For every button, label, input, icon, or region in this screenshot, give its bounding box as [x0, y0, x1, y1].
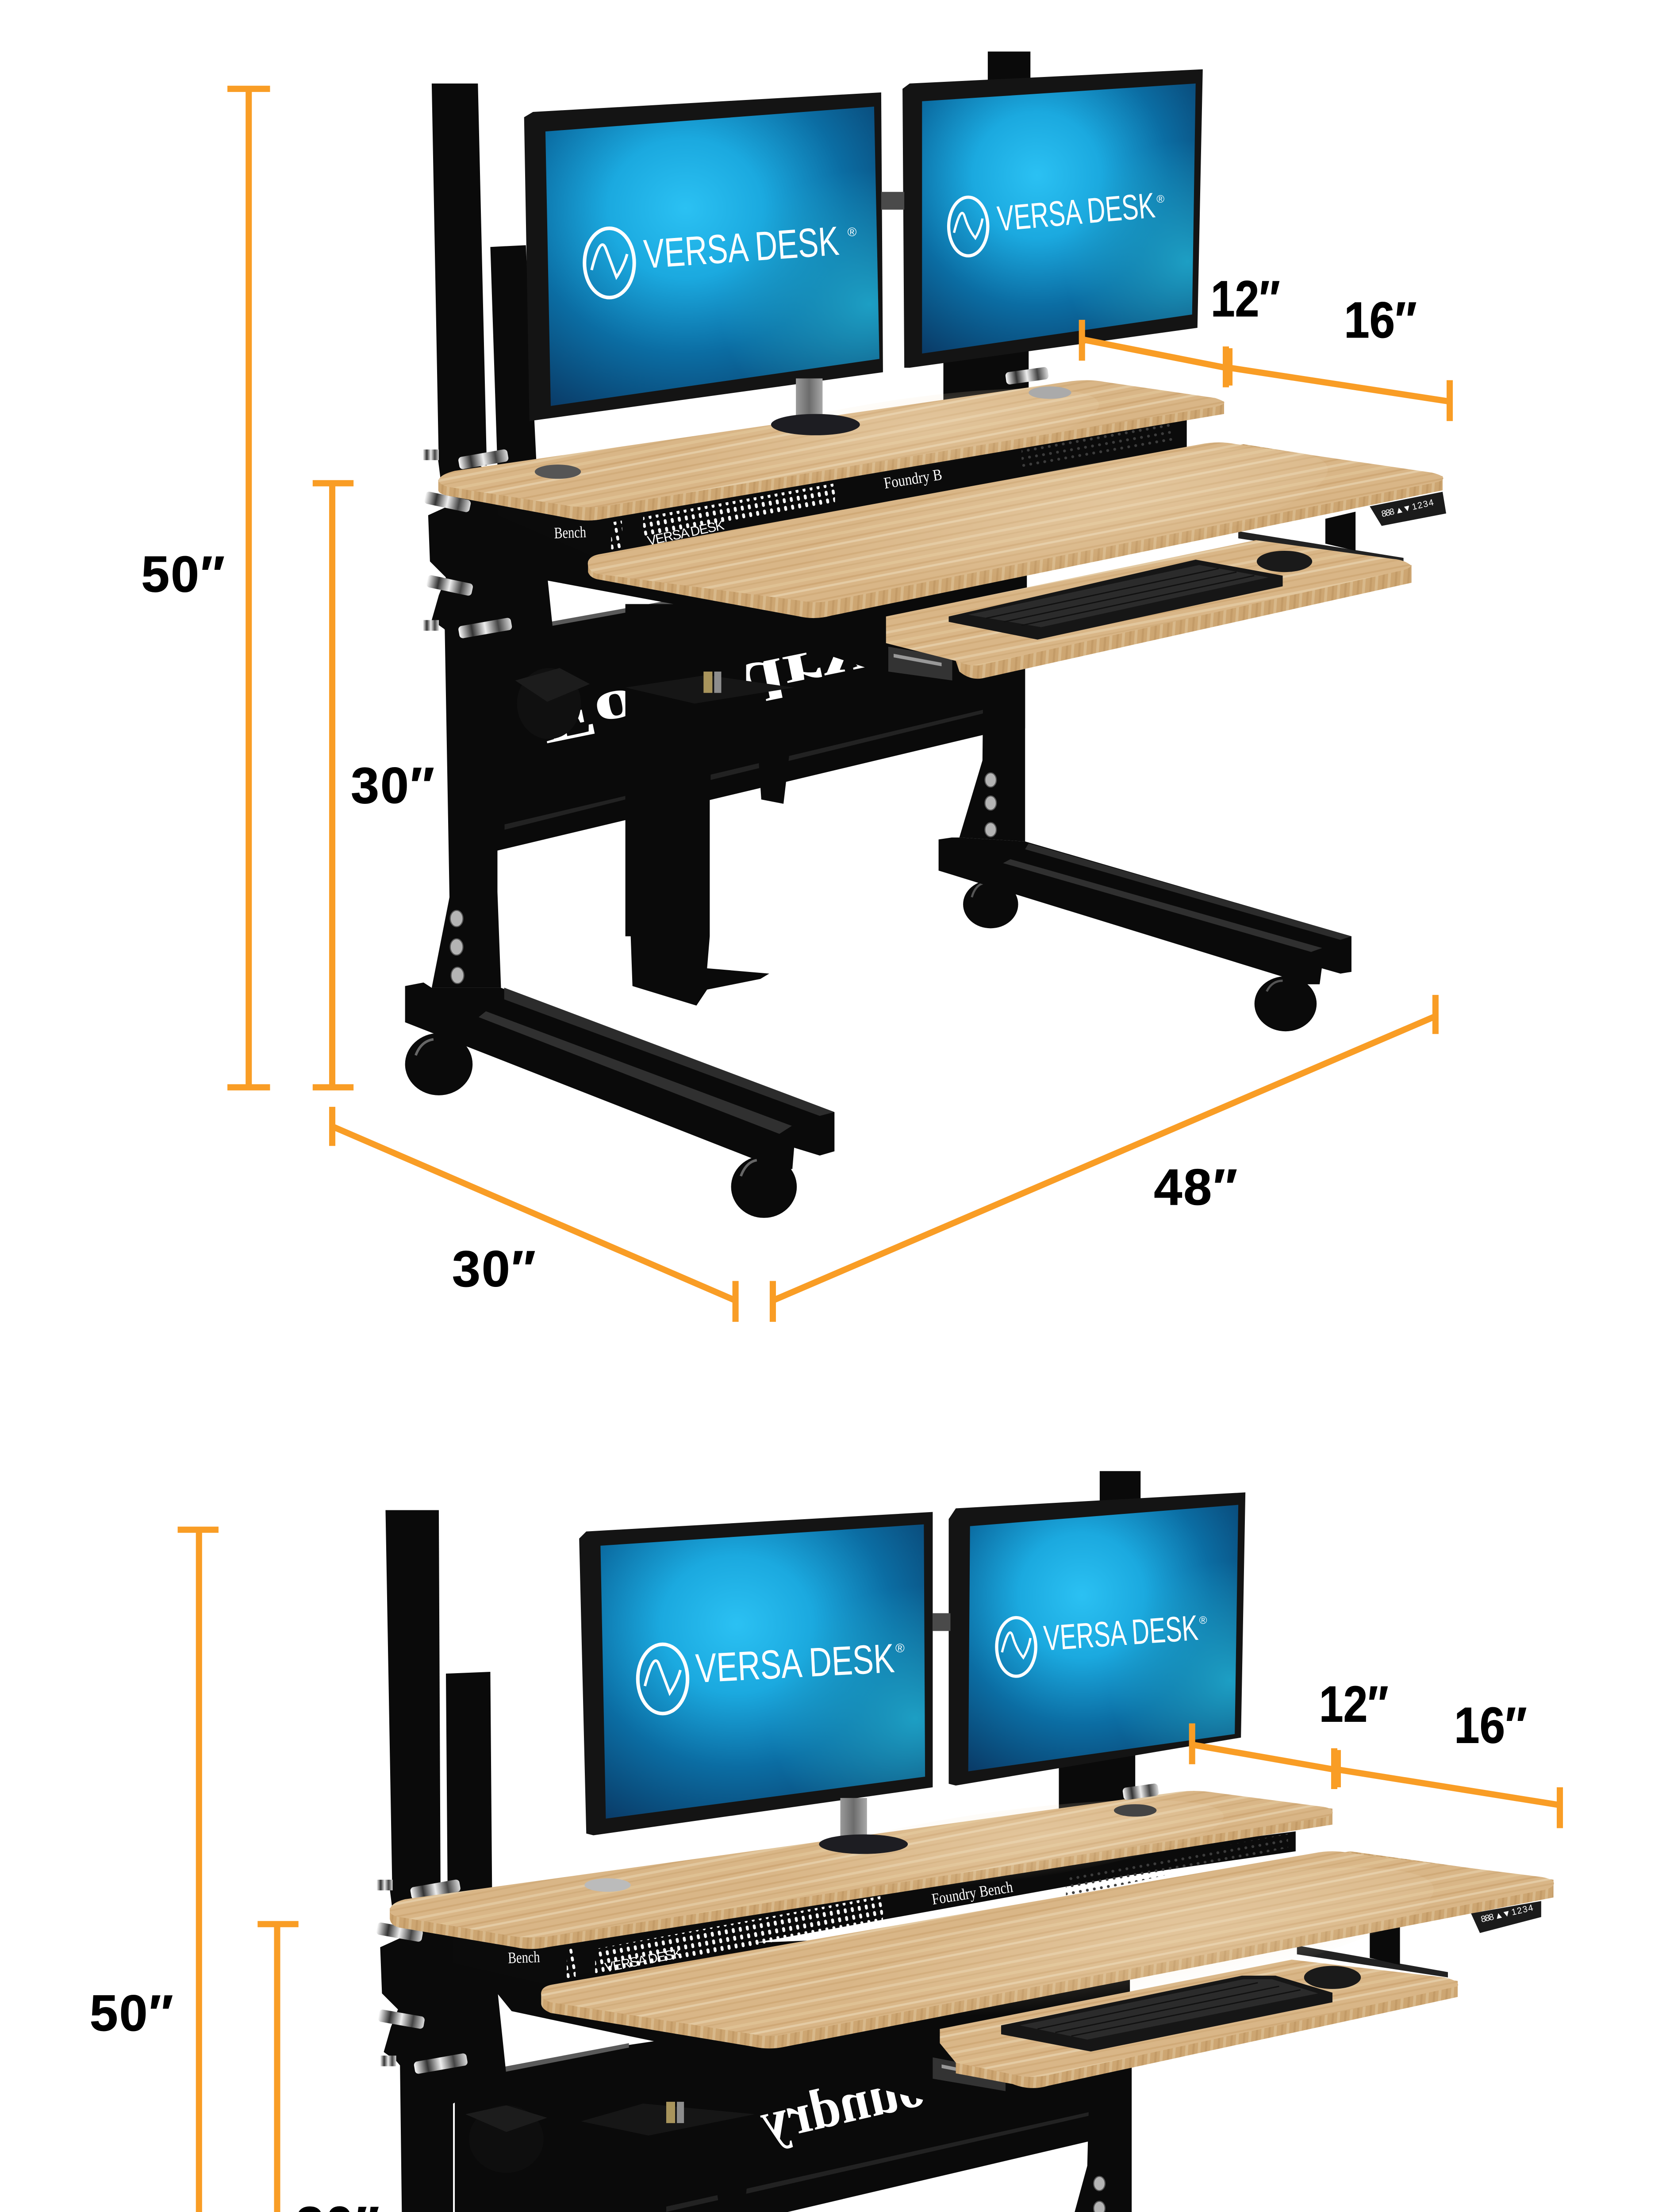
- leg bolts: [407, 2177, 1105, 2212]
- dimension: height 30 inch: [313, 483, 434, 1087]
- dimension: desk depth 16 inch: 16″: [1344, 292, 1417, 349]
- keyboard tray: [886, 540, 1412, 679]
- left leg: [432, 595, 501, 988]
- right leg: [1066, 2025, 1132, 2212]
- logo: right monitor: VERSA DESK: [1042, 1608, 1199, 1659]
- front foot: [405, 983, 834, 1169]
- rear foot: [939, 837, 1351, 984]
- dimension: depth 30 inch: [332, 1107, 736, 1322]
- dimension: desk depth 16 inch: 16″: [1454, 1697, 1527, 1754]
- dimension: width 48 inch: 48″: [1154, 1159, 1237, 1216]
- dimension: shelf depth 12 inch: [1082, 271, 1280, 387]
- logo: left monitor: VERSA DESK: [695, 1635, 895, 1691]
- rear posts: [432, 51, 1030, 465]
- logo: right monitor: ®: [1199, 1615, 1207, 1627]
- logo: left monitor: ®: [848, 225, 857, 239]
- logo: right monitor: [997, 1608, 1207, 1676]
- side bracket: [380, 1876, 507, 2104]
- dimension: height 50 inch: [90, 1530, 219, 2212]
- desk controller keypad: [1471, 1901, 1541, 1933]
- left monitor stand: [771, 378, 860, 435]
- left monitor stand: [819, 1798, 908, 1854]
- logo: left monitor: VERSA DESK: [642, 218, 841, 277]
- dimension: shelf depth 12 inch: [1192, 1676, 1388, 1789]
- clamp bolts: [376, 1879, 468, 2074]
- crossbeam with cut-out lettering: [495, 565, 1025, 851]
- dimension: width 48 inch: [773, 995, 1436, 1322]
- monitor arm link: [881, 192, 904, 210]
- logo: right monitor: [949, 185, 1164, 256]
- dimension: height 50 inch: 50″: [141, 546, 225, 603]
- height-adjust knob: [465, 2105, 547, 2173]
- mouse: [1257, 551, 1312, 572]
- desk controller keypad: [1370, 492, 1446, 526]
- keyboard tray: [940, 1960, 1458, 2088]
- under-desk beam: [483, 476, 1027, 675]
- front caster left: [405, 1033, 472, 1095]
- keyboard: [1001, 1976, 1332, 2051]
- logo: left monitor: [638, 1635, 905, 1713]
- right monitor: [902, 69, 1203, 368]
- dimension: shelf depth 12 inch: 12″: [1211, 271, 1280, 327]
- perforated modesty panel: Foundry Bench: [930, 1878, 1014, 1908]
- lower desktop: [541, 1836, 1554, 2055]
- rear caster right: [1255, 976, 1317, 1031]
- cable grommets: [535, 386, 1071, 479]
- dimension: height 30 inch: [257, 1924, 379, 2212]
- keyboard: [949, 560, 1283, 640]
- side bracket: [428, 444, 554, 672]
- dimension: height 30 inch: 30″: [351, 757, 434, 814]
- top desk: 48 inch model: [141, 51, 1450, 1322]
- rear posts: [385, 1471, 1140, 1910]
- dimension: desk depth 16 inch: [1229, 292, 1450, 421]
- perforated modesty panel: Foundry B: [883, 465, 943, 492]
- perforated modesty panel: [453, 1832, 1296, 1984]
- lower desktop: [588, 419, 1443, 618]
- clamp bolt by right monitor: [1122, 1783, 1159, 1801]
- logo: right monitor: VERSA DESK: [996, 185, 1157, 239]
- logo: left monitor: ®: [895, 1641, 905, 1655]
- perforated modesty panel: VERSA DESK: [646, 518, 726, 549]
- clamp bolts: [423, 449, 512, 639]
- under-desk beam: [465, 1928, 1130, 2118]
- keyboard tray slide rails: [933, 1919, 1448, 2091]
- rear caster left: [963, 880, 1018, 928]
- monitor arm link: [933, 1613, 951, 1631]
- left leg: [385, 2043, 457, 2212]
- perforated modesty panel: Bench: [507, 1948, 540, 1967]
- crossbeam with cut-out lettering: Foundry: [754, 2047, 962, 2153]
- right leg: [960, 586, 1025, 841]
- centre column with cable hook: [581, 2102, 755, 2212]
- left monitor: [579, 1512, 933, 1835]
- mouse: [1304, 1966, 1361, 1989]
- perforated modesty panel: Bench: [554, 523, 587, 542]
- dimension: height 50 inch: 50″: [90, 1985, 173, 2042]
- perforated modesty panel: [497, 418, 1187, 565]
- bottom desk: 60 inch model: [90, 1471, 1560, 2212]
- desk controller keypad: 888 ▲▼ 1 2 3 4: [1381, 498, 1435, 519]
- keyboard tray slide rails: [888, 512, 1404, 680]
- front caster right: [731, 1156, 797, 1218]
- leg bolts: [450, 773, 996, 983]
- upper shelf: [390, 1780, 1333, 1949]
- cable grommets: [584, 1804, 1156, 1892]
- desk controller keypad: 888 ▲▼ 1 2 3 4: [1480, 1903, 1534, 1924]
- left monitor: [524, 92, 883, 421]
- perforated modesty panel: VERSA DESK: [603, 1946, 683, 1975]
- clamp bolt by right monitor: [1005, 367, 1049, 385]
- logo: left monitor: [584, 218, 857, 298]
- crossbeam with cut-out lettering: Foundry: [536, 629, 872, 757]
- crossbeam with cut-out lettering: [455, 1972, 1119, 2212]
- dimension: height 50 inch: [141, 89, 270, 1087]
- upper shelf: [438, 369, 1225, 521]
- logo: right monitor: ®: [1156, 193, 1164, 205]
- dimension: desk depth 16 inch: [1338, 1697, 1560, 1828]
- centre column with cable hook: [626, 672, 796, 1006]
- dimension: depth 30 inch: 30″: [452, 1241, 536, 1298]
- right monitor: [949, 1492, 1245, 1786]
- dimension: shelf depth 12 inch: 12″: [1319, 1676, 1388, 1732]
- height-adjust knob: [515, 668, 590, 739]
